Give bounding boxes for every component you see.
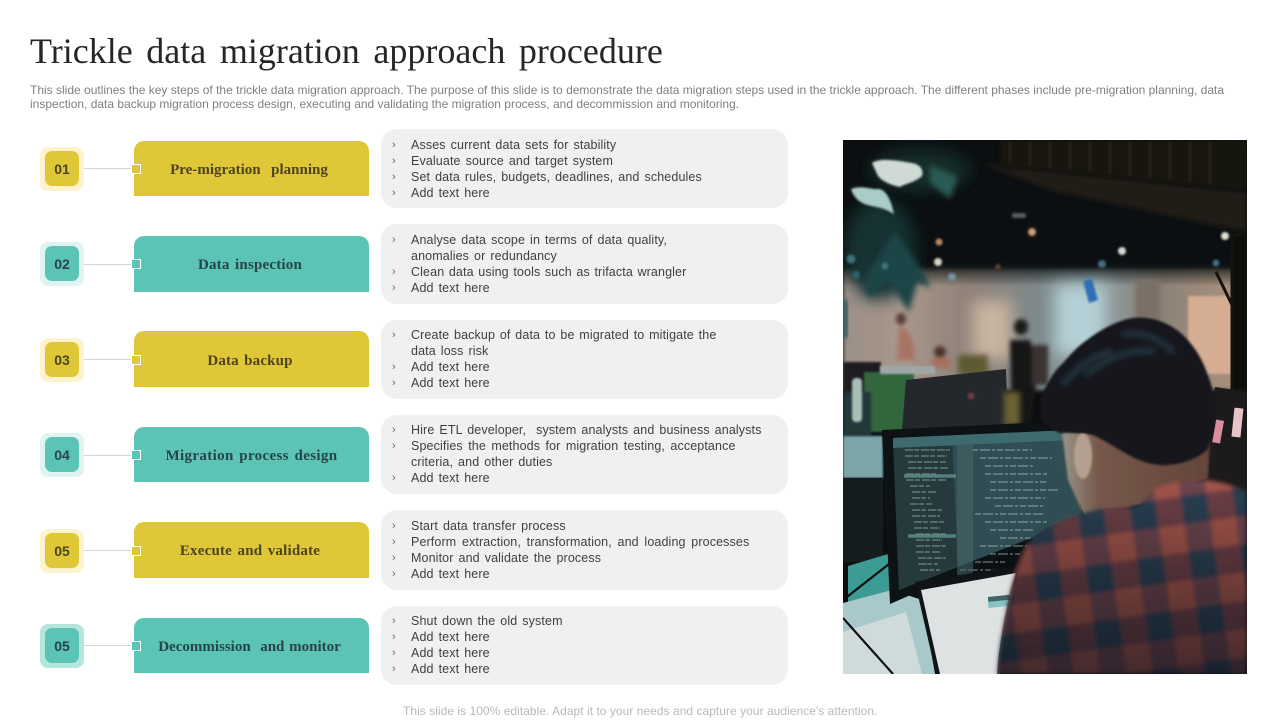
details panel 06: › xyxy=(392,631,396,643)
details panel 02: › xyxy=(392,266,396,278)
number badge 01: 01 xyxy=(54,161,70,177)
heading: decommission and monitor xyxy=(134,618,369,673)
step 3: data backup xyxy=(40,320,788,399)
details panel 06: Add text here xyxy=(411,662,490,676)
person: neck and ear xyxy=(1062,432,1210,518)
title: Trickle data migration approach procedure xyxy=(30,31,663,71)
connector 03 xyxy=(84,359,134,360)
heading: migration process design xyxy=(134,427,369,482)
details panel 01: › xyxy=(392,171,396,183)
blurred back wall xyxy=(843,262,1235,390)
heading: execute and validate xyxy=(134,522,369,578)
details panel 05: › xyxy=(392,552,396,564)
description text: inspection, data backup migration process design, executing and validating the migration process, and decommission and monitoring. xyxy=(30,96,739,110)
details panel 06: › xyxy=(392,663,396,675)
connector pin 01 xyxy=(131,164,141,174)
main monitor with code xyxy=(882,421,1082,604)
details panel 01 xyxy=(381,129,788,208)
green planter and desk in the distance xyxy=(843,355,988,436)
heading: data inspection: Data inspection xyxy=(198,257,302,273)
details panel 03: › xyxy=(392,329,396,341)
details panel 04: Specifies the methods for migration testing, acceptance xyxy=(411,439,736,453)
person: plaid shirt xyxy=(997,480,1247,674)
details panel 05: Start data transfer process xyxy=(411,519,566,533)
connector 04 xyxy=(84,455,134,456)
details panel 05: Add text here xyxy=(411,567,490,581)
connector 05 xyxy=(84,550,134,551)
heading: pre-migration planning: Pre-migration planning xyxy=(170,162,328,178)
step 6: decommission and monitor xyxy=(40,606,788,685)
number badge 02 xyxy=(40,242,84,286)
connector pin 04 xyxy=(131,450,141,460)
heading: decommission and monitor: Decommission and monitor xyxy=(158,639,341,655)
dark ceiling background xyxy=(843,140,1247,674)
number badge 04: 04 xyxy=(54,447,70,463)
details panel 04: Hire ETL developer, system analysts and business analysts xyxy=(411,423,762,437)
details panel 01: Asses current data sets for stability xyxy=(411,138,616,152)
details panel 04: › xyxy=(392,472,396,484)
details panel 06: Shut down the old system xyxy=(411,614,563,628)
photo: developer with code on monitor xyxy=(843,140,1247,674)
details panel 01: › xyxy=(392,139,396,151)
details panel 02: › xyxy=(392,234,396,246)
number badge 02: 02 xyxy=(54,256,70,272)
left side desk xyxy=(843,436,935,674)
details panel 03 xyxy=(381,320,788,399)
ceiling lights xyxy=(934,213,1229,281)
number badge 03 xyxy=(40,338,84,382)
details panel 06: › xyxy=(392,615,396,627)
details panel 04 xyxy=(381,415,788,494)
number badge 05 (second) xyxy=(40,624,84,668)
details panel 06 xyxy=(381,606,788,685)
connector 02 xyxy=(84,264,134,265)
description text: This slide outlines the key steps of the trickle data migration approach. The purpose of this slide is to demonstrate the data migration steps used in the trickle approach. The different phases include pre-migration planning, data xyxy=(30,83,1224,97)
heading: migration process design: Migration process design xyxy=(166,448,337,464)
details panel 01: › xyxy=(392,187,396,199)
number badge 05: 05 xyxy=(54,543,70,559)
details panel 05: Perform extraction, transformation, and loading processes xyxy=(411,535,749,549)
details panel 01: Set data rules, budgets, deadlines, and schedules xyxy=(411,170,702,184)
connector pin 06 xyxy=(131,641,141,651)
details panel 05: › xyxy=(392,536,396,548)
details panel 01: Add text here xyxy=(411,186,490,200)
step 4: migration process design xyxy=(40,415,788,494)
details panel 06: Add text here xyxy=(411,630,490,644)
footer note: This slide is 100% editable. Adapt it to your needs and capture your audience's attention. xyxy=(403,704,877,718)
number badge 03: 03 xyxy=(54,352,70,368)
number badge 05 (second): 05 xyxy=(54,638,70,654)
number badge 01 xyxy=(40,147,84,191)
description text xyxy=(30,83,1224,110)
foliage xyxy=(843,150,970,338)
details panel 04: › xyxy=(392,440,396,452)
connector pin 03 xyxy=(131,355,141,365)
connector pin 05 xyxy=(131,546,141,556)
details panel 03: › xyxy=(392,377,396,389)
details panel 01: › xyxy=(392,155,396,167)
step 5: execute and validate xyxy=(40,510,788,590)
connector 01 xyxy=(84,168,134,169)
heading: data backup xyxy=(134,331,369,387)
details panel 02: › xyxy=(392,282,396,294)
details panel 04: criteria, and other duties xyxy=(411,455,552,469)
details panel 04: › xyxy=(392,424,396,436)
details panel 03: Add text here xyxy=(411,360,490,374)
details panel 03: Create backup of data to be migrated to mitigate the xyxy=(411,328,716,342)
heading: data backup: Data backup xyxy=(207,353,293,369)
far right monitor xyxy=(1200,387,1247,495)
connector 06 xyxy=(84,645,134,646)
details panel 02: anomalies or redundancy xyxy=(411,249,557,263)
heading: execute and validate: Execute and validate xyxy=(180,543,320,559)
details panel 02: Analyse data scope in terms of data quality, xyxy=(411,233,667,247)
heading: data inspection xyxy=(134,236,369,292)
details panel 03: › xyxy=(392,361,396,373)
step 2: data inspection xyxy=(40,224,788,304)
details panel 06: Add text here xyxy=(411,646,490,660)
details panel 02: Add text here xyxy=(411,281,490,295)
heading: pre-migration planning xyxy=(134,141,369,196)
connector pin 02 xyxy=(131,259,141,269)
right pillar and tree xyxy=(1216,235,1247,390)
details panel 01: Evaluate source and target system xyxy=(411,154,613,168)
details panel 02: Clean data using tools such as trifacta wrangler xyxy=(411,265,686,279)
blurred people in the distance xyxy=(896,313,1048,430)
details panel 03: data loss risk xyxy=(411,344,488,358)
number badge 05 xyxy=(40,529,84,573)
person: hair highlights xyxy=(1062,333,1174,385)
details panel 05: › xyxy=(392,568,396,580)
details panel 06: › xyxy=(392,647,396,659)
ceiling beams xyxy=(980,140,1247,232)
person: hair xyxy=(1040,318,1215,465)
details panel 03: Add text here xyxy=(411,376,490,390)
number badge 04 xyxy=(40,433,84,477)
details panel 04: Add text here xyxy=(411,471,490,485)
rear monitor xyxy=(902,369,1020,430)
details panel 05 xyxy=(381,510,788,590)
details panel 05: Monitor and validate the process xyxy=(411,551,601,565)
step 1: pre-migration planning xyxy=(40,129,788,208)
details panel 05: › xyxy=(392,520,396,532)
details panel 02 xyxy=(381,224,788,304)
laptop xyxy=(915,566,1018,674)
